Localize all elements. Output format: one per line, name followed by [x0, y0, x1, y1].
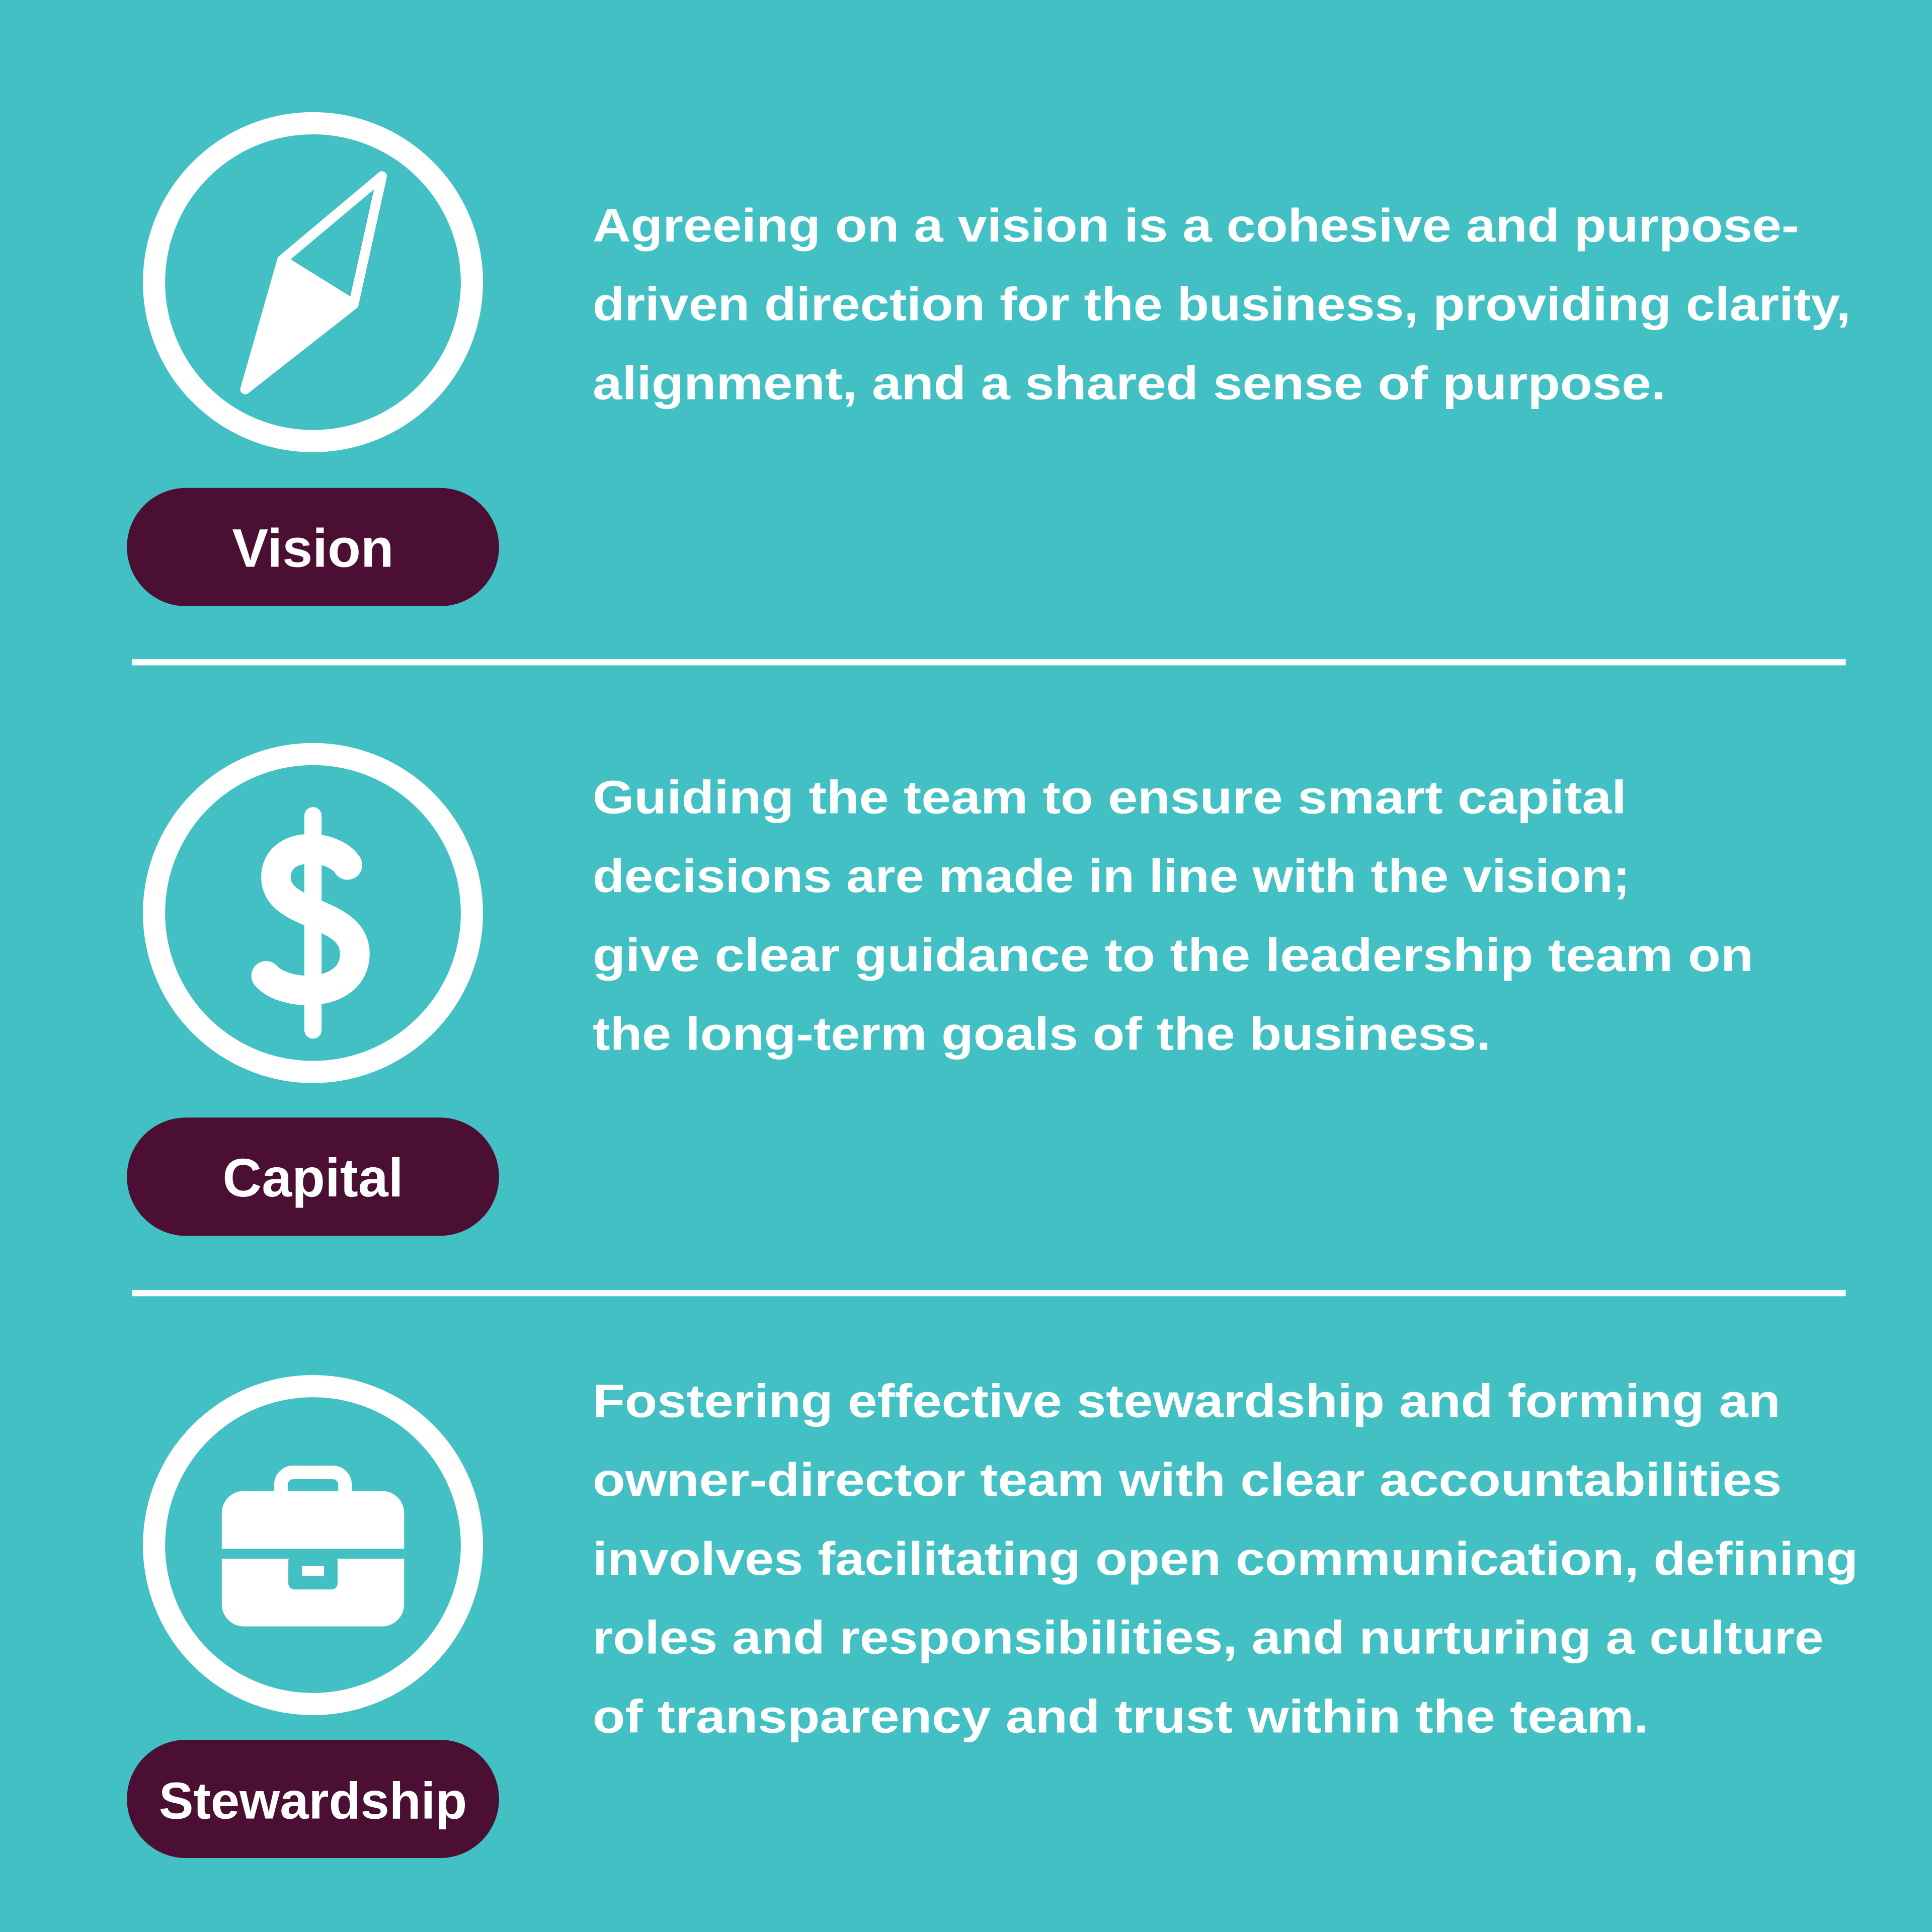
text block: stewardship description: roles and responsibilities, and nurturing a culture [593, 1612, 1823, 1664]
text block: stewardship description: involves facilitating open communication, defining [593, 1533, 1858, 1585]
text block: capital description: Guiding the team to ensure smart capital [593, 771, 1627, 823]
text block: stewardship description: Fostering effective stewardship and forming an [593, 1375, 1781, 1427]
text block: stewardship description [593, 1375, 1858, 1742]
icon: dollar [154, 754, 472, 1072]
text block: capital description [593, 771, 1753, 1060]
label pill: Vision: Vision [232, 518, 394, 579]
text block: stewardship description: owner-director team with clear accountabilities [593, 1454, 1782, 1506]
text block: capital description: the long-term goals of the business. [593, 1008, 1491, 1060]
section: vision [127, 123, 1850, 606]
section: stewardship [127, 1375, 1858, 1858]
section: capital [127, 754, 1753, 1236]
text block: capital description: decisions are made in line with the vision; [593, 850, 1630, 902]
text block: vision description: Agreeing on a vision is a cohesive and purpose- [593, 199, 1799, 252]
text block: capital description: give clear guidance to the leadership team on [593, 929, 1753, 981]
label pill: Vision [127, 488, 499, 606]
icon: compass [154, 123, 472, 441]
label pill: Stewardship: Stewardship [159, 1772, 467, 1830]
text block: vision description: driven direction for the business, providing clarity, [593, 278, 1850, 331]
icon: briefcase [154, 1386, 472, 1704]
text block: vision description [593, 199, 1850, 409]
text block: vision description: alignment, and a shared sense of purpose. [593, 357, 1666, 409]
label pill: Capital [127, 1117, 499, 1236]
label pill: Stewardship [127, 1740, 499, 1858]
text block: stewardship description: of transparency and trust within the team. [593, 1690, 1649, 1742]
label pill: Capital: Capital [222, 1147, 404, 1208]
